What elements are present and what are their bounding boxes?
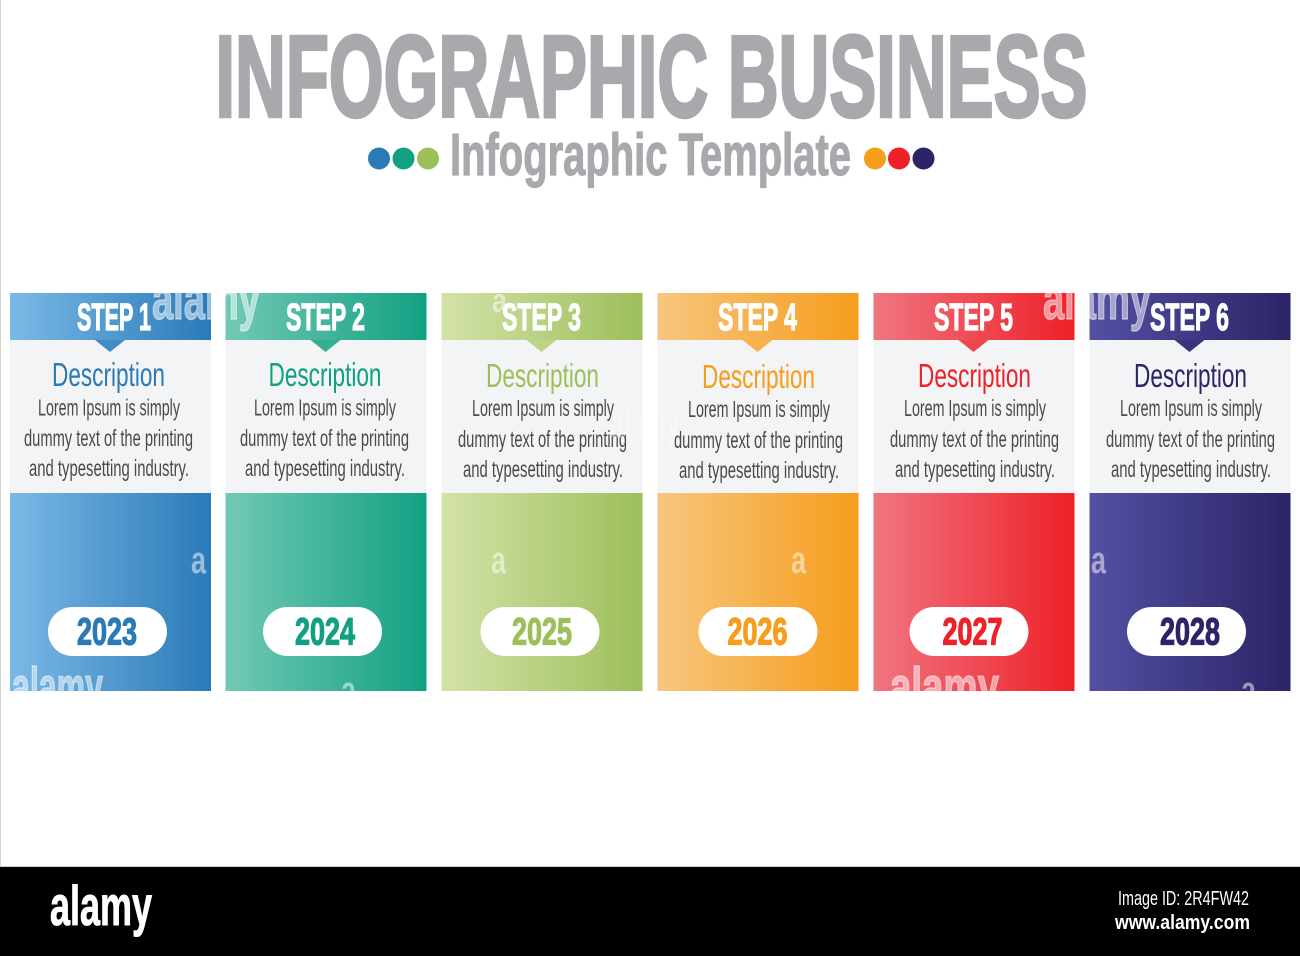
body text: and typesetting industry.: [679, 457, 839, 483]
description heading: Description: [702, 358, 815, 395]
body text: dummy text of the printing: [674, 427, 843, 453]
panel: step 3: [442, 293, 642, 691]
body text: [890, 395, 1059, 482]
body text: dummy text of the printing: [890, 426, 1059, 452]
body text: dummy text of the printing: [458, 426, 627, 452]
body text: [24, 394, 193, 481]
footer bar: [0, 866, 1300, 956]
year pill: [480, 607, 600, 656]
step label: STEP 1: [77, 297, 151, 339]
body text: and typesetting industry.: [463, 456, 623, 482]
body text: Lorem Ipsum is simply: [38, 394, 180, 420]
subtitle: Infographic Template: [450, 122, 851, 188]
watermark fragments: a: [491, 540, 507, 582]
step label: STEP 5: [934, 297, 1013, 339]
icon: right colour dots: [864, 148, 934, 170]
watermark fragments: alamy: [610, 400, 680, 447]
step label: STEP 3: [502, 297, 581, 339]
body text: Lorem Ipsum is simply: [688, 396, 830, 422]
body text: [1106, 395, 1275, 482]
step label: STEP 2: [286, 297, 365, 339]
year pill: [48, 607, 167, 656]
year pill: [263, 607, 382, 656]
year pill: 2024: [295, 612, 355, 654]
body text: and typesetting industry.: [245, 455, 405, 481]
year pill: 2027: [942, 612, 1002, 654]
panel: step 4: [658, 293, 858, 691]
watermark fragments: alamy: [890, 657, 999, 717]
body text: Lorem Ipsum is simply: [472, 395, 614, 421]
icon: left colour dots: [368, 148, 439, 170]
description heading: Description: [918, 357, 1031, 394]
watermark fragments: a: [341, 670, 357, 712]
panel: step 5: [874, 293, 1074, 691]
step label: STEP 4: [718, 297, 797, 339]
body text: and typesetting industry.: [895, 456, 1055, 482]
year pill: [698, 607, 818, 656]
watermark fragments: [13, 293, 1254, 691]
description heading: Description: [52, 356, 165, 393]
website: www.alamy.com: [1114, 912, 1250, 934]
body text: dummy text of the printing: [24, 425, 193, 451]
year pill: 2023: [77, 612, 137, 654]
watermark fragments: a: [1241, 670, 1257, 712]
body text: [240, 394, 409, 481]
panel: step 2: [226, 293, 426, 691]
description heading: Description: [1134, 357, 1247, 394]
year pill: 2025: [512, 612, 572, 654]
watermark fragments: a: [492, 282, 508, 320]
watermark fragments: alamy: [1043, 267, 1151, 332]
panel: step 6: [1090, 293, 1290, 691]
panel: step 1: [10, 293, 211, 691]
body text: Lorem Ipsum is simply: [254, 394, 396, 420]
year pill: [910, 607, 1028, 656]
body text: Lorem Ipsum is simply: [904, 395, 1046, 421]
year pill: 2026: [728, 612, 788, 654]
body text: dummy text of the printing: [240, 425, 409, 451]
footer logo: alamy: [50, 874, 152, 937]
body text: and typesetting industry.: [29, 455, 189, 481]
body text: [458, 395, 627, 482]
watermark fragments: a: [191, 540, 207, 582]
step label: STEP 6: [1150, 297, 1229, 339]
year pill: [1127, 607, 1246, 656]
watermark fragments: alamy: [12, 657, 103, 717]
image id: Image ID: 2R4FW42: [1118, 888, 1249, 910]
watermark fragments: alamy: [152, 267, 260, 332]
body text: [674, 396, 843, 483]
description heading: Description: [268, 356, 382, 393]
year pill: 2028: [1160, 612, 1220, 654]
watermark fragments: a: [1091, 540, 1107, 582]
description heading: Description: [486, 357, 599, 394]
watermark fragments: a: [791, 540, 807, 582]
